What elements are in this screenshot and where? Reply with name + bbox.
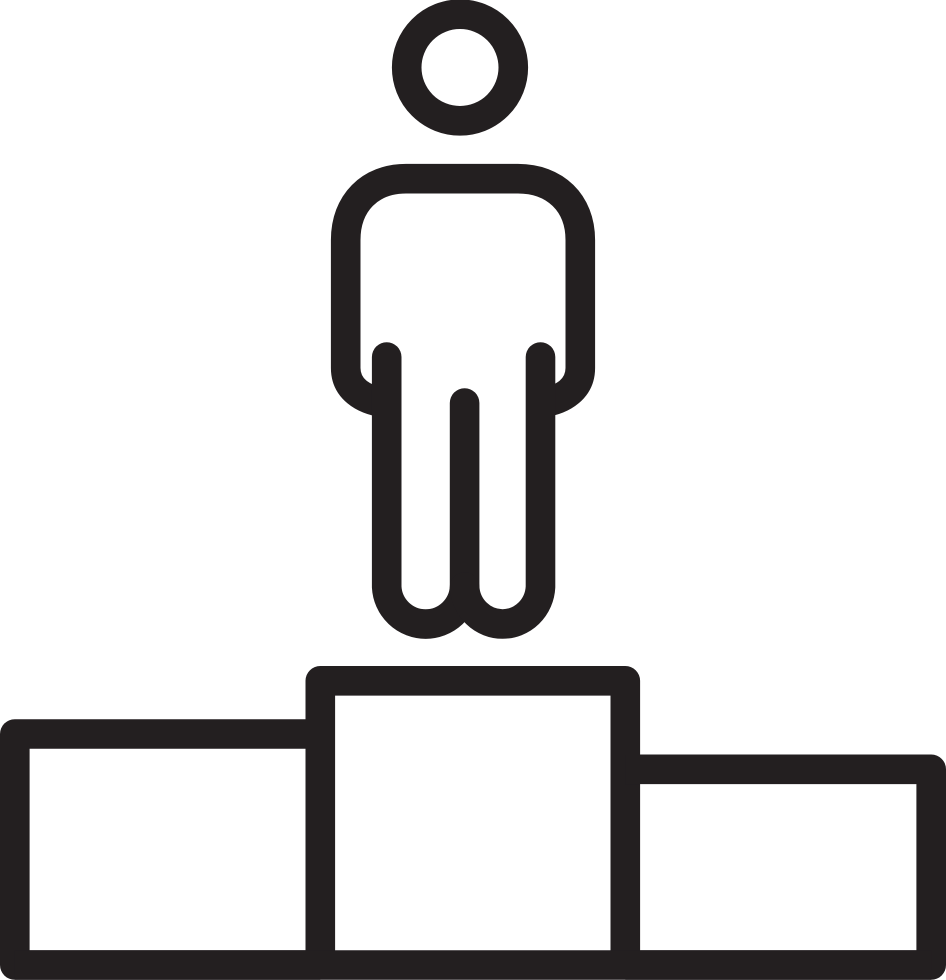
head: [407, 14, 513, 121]
icon: person: [346, 14, 580, 624]
center step: [320, 681, 625, 965]
right leg: [465, 357, 540, 624]
base: [15, 950, 931, 980]
right step: [625, 769, 931, 965]
legs: [387, 357, 465, 624]
left step: [15, 734, 320, 965]
podium: [15, 681, 931, 965]
torso and arms: [346, 179, 580, 403]
